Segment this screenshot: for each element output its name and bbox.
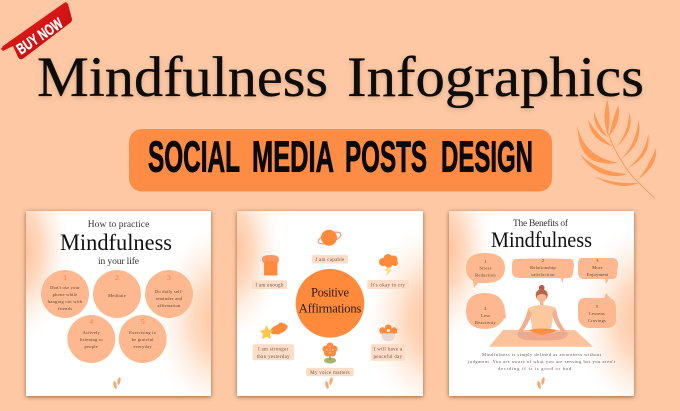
label: i will have a peaceful day: peaceful day xyxy=(373,355,403,360)
bubble 5: lessens cravings: 5 xyxy=(596,304,599,309)
step 4: listening to xyxy=(80,337,103,342)
title xyxy=(37,46,644,109)
step 4: Actively xyxy=(83,330,101,335)
icon: cloud and lightning xyxy=(379,254,398,276)
step 1: friends xyxy=(58,306,72,311)
subtitle pill xyxy=(129,129,552,192)
bubble 2: relationship satisfaction: Relationship xyxy=(530,265,556,270)
step 2 xyxy=(93,270,141,318)
step 5: 5 xyxy=(141,317,145,326)
step 1: Don't use your xyxy=(50,285,80,290)
bubble 5: lessens cravings xyxy=(578,293,616,328)
icon: logo xyxy=(537,377,545,389)
subtitle pill: DESIGN xyxy=(441,132,533,182)
label: i am capable xyxy=(312,255,348,264)
bubble 3: more enjoyment xyxy=(578,258,618,284)
label: i am stronger than yesterday xyxy=(253,344,294,360)
label: i will have a peaceful day: I will have a xyxy=(374,348,403,352)
bubble 2: relationship satisfaction xyxy=(512,258,574,283)
heading: mindfulness: Mindfulness xyxy=(491,227,592,252)
body text: deciding if it is good or bad. xyxy=(498,366,573,371)
bubble 1: stress reduction: Stress xyxy=(479,266,492,270)
bubble 2: relationship satisfaction: 2 xyxy=(542,258,544,263)
icon: star and cloud xyxy=(260,322,289,339)
step 5: be grateful xyxy=(132,337,154,342)
subtitle pill: SOCIAL xyxy=(148,132,240,182)
step 3: 3 xyxy=(167,273,171,282)
icon: palm leaf xyxy=(577,99,656,198)
bubble 4: less reactivity xyxy=(466,293,506,329)
panel: benefits of mindfulness xyxy=(446,209,637,400)
body text xyxy=(467,352,616,371)
icon: buy now ribbon: BUY NOW xyxy=(14,15,67,58)
heading: how to practice: How to practice xyxy=(88,220,149,230)
step 4 xyxy=(67,315,115,363)
step 1 xyxy=(41,270,89,318)
step 5 xyxy=(119,315,167,363)
subtitle pill: POSTS xyxy=(345,132,427,182)
label: i am enough: I am enough xyxy=(255,284,284,288)
step 3: affirmation xyxy=(158,303,181,308)
label: i am enough xyxy=(252,280,287,289)
subtitle pill: MEDIA xyxy=(252,132,334,182)
heading: the benefits of: The Benefits of xyxy=(513,218,569,229)
step 2: Meditate xyxy=(108,293,126,298)
bubble 4: less reactivity: 4 xyxy=(484,306,487,311)
step 5: Exercising to xyxy=(129,330,157,335)
bubble 3: more enjoyment: More xyxy=(592,265,603,270)
label: i am capable: I am capable xyxy=(315,258,345,263)
step 5: everyday xyxy=(133,344,152,349)
illustration: meditating woman on mat xyxy=(489,285,593,347)
bubble 3: more enjoyment: 3 xyxy=(596,258,599,263)
step 3 xyxy=(145,270,193,318)
label: i am stronger than yesterday: I am stronger xyxy=(258,348,289,352)
center circle: Affirmations xyxy=(299,301,361,315)
bubble 3: more enjoyment: Enjoyment xyxy=(586,272,609,277)
title: Infographics xyxy=(347,46,644,109)
bubble 5: lessens cravings: Lessens xyxy=(589,311,605,316)
bubble 5: lessens cravings: Cravings xyxy=(588,318,606,323)
center circle: Positive xyxy=(311,286,349,300)
bubble 1: stress reduction: Reduction xyxy=(475,272,496,278)
label: i am stronger than yesterday: than yesterday xyxy=(257,355,290,360)
step 3: reminder and xyxy=(156,296,183,301)
panel: positive affirmations xyxy=(234,209,426,400)
label: my voice matters: My voice matters xyxy=(310,371,350,376)
heading: mindfulness: Mindfulness xyxy=(60,230,172,255)
icon: toast xyxy=(262,255,279,276)
panel: how to practice mindfulness xyxy=(23,209,214,400)
icon: flower xyxy=(322,342,338,364)
center circle xyxy=(296,269,364,338)
bubble 2: relationship satisfaction: satisfaction xyxy=(531,272,555,277)
step 3: Do daily self- xyxy=(155,289,183,294)
label: it's okay to cry: It's okay to cry xyxy=(371,283,405,288)
step 1: 1 xyxy=(63,273,67,282)
bubble 1: stress reduction: 1 xyxy=(484,259,487,264)
bubble 1: stress reduction xyxy=(466,253,505,288)
bubble 4: less reactivity: Less xyxy=(481,313,490,318)
step 2: 2 xyxy=(115,273,119,282)
body text: Mindfulness is simply defined as awareness without xyxy=(482,352,602,357)
step 4: 4 xyxy=(89,317,93,326)
icon: planet xyxy=(317,230,342,246)
label: my voice matters xyxy=(306,368,354,376)
heading: in your life: in your life xyxy=(98,256,139,267)
icon: logo xyxy=(113,377,121,389)
step 4: people xyxy=(85,344,98,349)
step 1: phone while xyxy=(53,292,77,297)
step 1: hanging out with xyxy=(48,299,83,304)
bubble 4: less reactivity: Reactivity xyxy=(475,320,496,325)
body text: judgment. You are aware of what you are sensing but you aren't xyxy=(467,359,616,364)
label: it's okay to cry xyxy=(367,280,409,289)
icon: mushroom xyxy=(379,324,397,341)
icon: logo xyxy=(325,377,333,389)
label: i will have a peaceful day xyxy=(371,344,405,361)
icon: buy now ribbon xyxy=(1,2,72,59)
title: Mindfulness xyxy=(37,46,328,109)
